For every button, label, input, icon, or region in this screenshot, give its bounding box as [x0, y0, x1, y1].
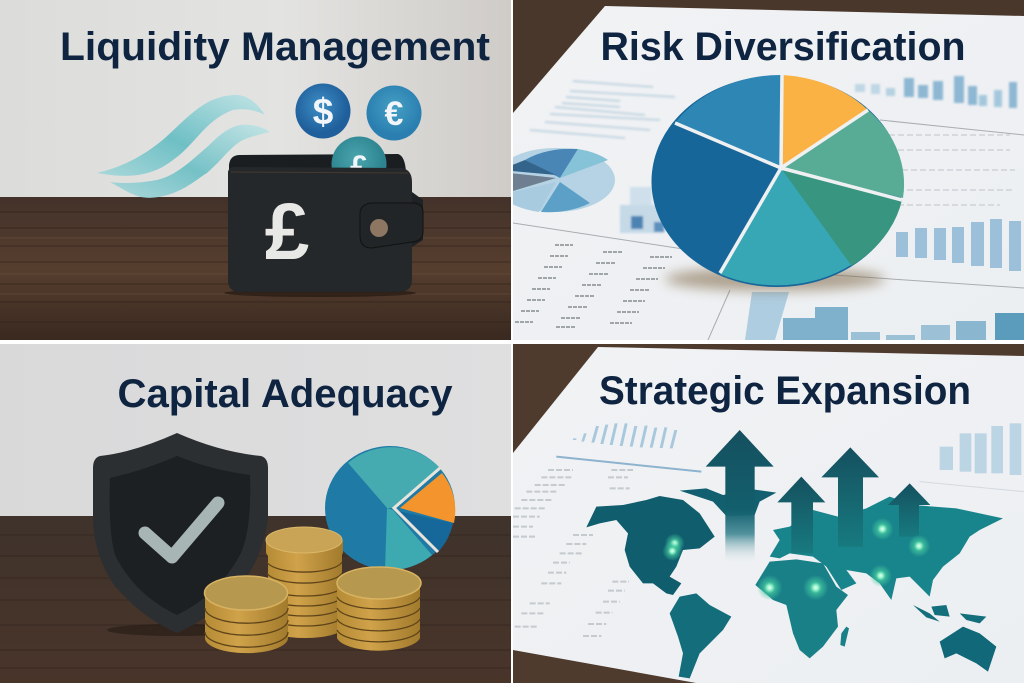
heading: Liquidity Management: [60, 25, 490, 69]
small pie chart: [513, 148, 615, 212]
arrow: third: [821, 447, 879, 547]
heading: Capital Adequacy: [118, 372, 453, 416]
icon: dollar coin: $: [313, 91, 334, 132]
faint bar charts: [573, 423, 1021, 475]
table lines: [515, 245, 672, 327]
heading: Risk Diversification: [600, 25, 966, 69]
background: [513, 344, 1024, 683]
icon: dollar coin: [296, 84, 350, 138]
coin stack: left: [204, 576, 288, 653]
table lines: [513, 470, 633, 636]
wooden table: [0, 197, 511, 340]
icon: euro coin: €: [385, 95, 404, 133]
wooden table: [0, 516, 511, 683]
zoomed coordinate group: [513, 423, 1024, 678]
pie shadow: [665, 267, 885, 291]
panel: risk diversification: [495, 0, 1024, 340]
icon: wallet: £: [265, 187, 309, 276]
large pie chart: [652, 75, 904, 287]
panel: strategic expansion: [513, 344, 1024, 683]
background: [513, 0, 1024, 113]
panel: liquidity management: [0, 0, 511, 340]
wall background: [0, 0, 511, 197]
icon: pound coin: [332, 136, 386, 168]
blue rule: [556, 457, 701, 472]
arrow: second: [777, 477, 825, 553]
world map: [586, 488, 1003, 678]
icon: pie chart: [325, 446, 455, 570]
icon: shield with check: [93, 433, 268, 636]
panel: capital adequacy: [0, 344, 511, 683]
icon: wallet back: [229, 154, 406, 170]
arrow: large left: [706, 430, 774, 563]
map glow points: [662, 518, 930, 600]
heading: Strategic Expansion: [599, 369, 971, 413]
large bottom bars: [745, 292, 1024, 340]
coin stack: middle: [266, 527, 343, 638]
icon: teal swoosh: [97, 95, 270, 198]
report paper: [513, 6, 1024, 340]
arrow: fourth: [888, 483, 930, 537]
icon: euro coin: [366, 86, 422, 140]
icon: wallet: [224, 167, 423, 297]
report paper: [513, 347, 1024, 683]
small bar charts: [855, 76, 1017, 108]
faint text lines: [530, 81, 675, 138]
coin stack: right: [337, 567, 421, 651]
icon: pound coin: £: [350, 149, 368, 185]
wall background: [0, 344, 511, 516]
